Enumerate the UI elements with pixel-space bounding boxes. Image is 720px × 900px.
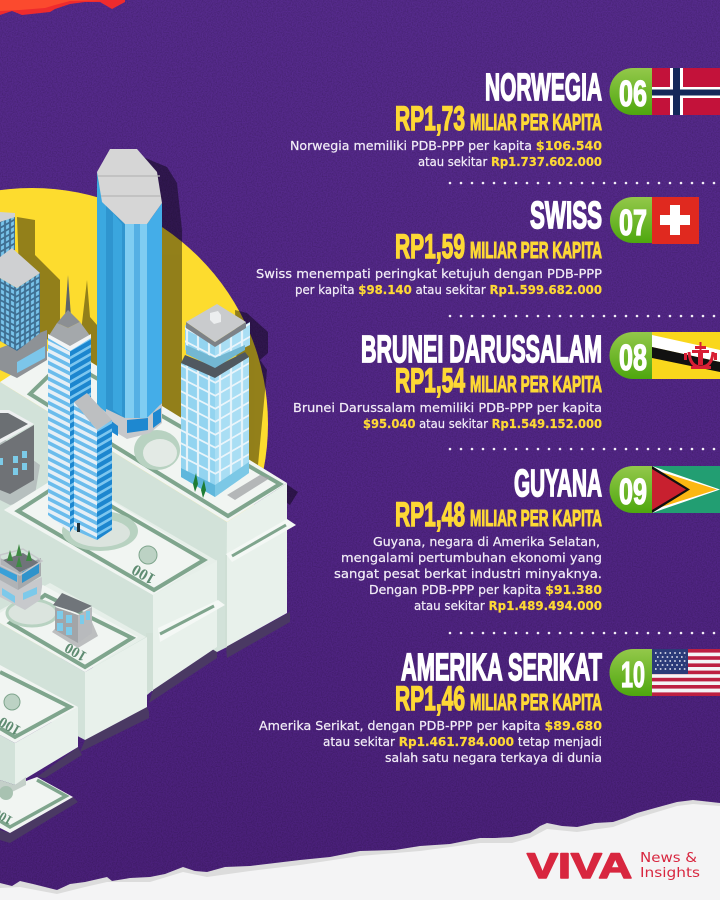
heading: Swiss: SWISS bbox=[530, 195, 602, 237]
description: $95.040 atau sekitar Rp1.549.152.000 bbox=[363, 416, 602, 431]
description: sangat pesat berkat industri minyaknya. bbox=[334, 566, 602, 581]
description: Guyana, negara di Amerika Selatan, bbox=[373, 534, 600, 549]
number pill 09 bbox=[609, 466, 652, 513]
striped twin blue tower bbox=[48, 275, 112, 540]
number pill 08: 08 bbox=[619, 337, 647, 378]
number pill 07: 07 bbox=[619, 202, 647, 243]
number pill 07 bbox=[610, 197, 652, 243]
number pill 06 bbox=[610, 68, 652, 115]
left towers bbox=[0, 212, 47, 378]
money stack B bbox=[0, 472, 225, 695]
number pill 10: 10 bbox=[621, 654, 645, 695]
number pill 09: 09 bbox=[619, 471, 647, 512]
description: atau sekitar Rp1.461.784.000 tetap menjadi bbox=[323, 734, 602, 749]
money stack D bbox=[0, 665, 78, 785]
section 07 Swiss bbox=[256, 195, 699, 297]
section 06 Norwegia bbox=[290, 67, 720, 169]
heading: Guyana: GUYANA bbox=[514, 463, 602, 505]
description: Dengan PDB-PPP per kapita $91.380 bbox=[369, 582, 602, 597]
logo: VIVA News & Insights: VIVA bbox=[527, 847, 632, 886]
description bbox=[290, 138, 602, 169]
money stack A bbox=[0, 343, 296, 652]
amount: Rp1,54: RP1,54 bbox=[395, 362, 465, 400]
bottom single bill bbox=[0, 777, 73, 833]
description bbox=[259, 718, 602, 765]
money stack C with small buildings: 100 bbox=[62, 639, 90, 664]
amount unit: MILIAR PER KAPITA bbox=[470, 689, 602, 715]
torn white paper footer bbox=[0, 800, 720, 900]
section 08 Brunei Darussalam bbox=[293, 329, 720, 431]
description: Norwegia memiliki PDB-PPP per kapita $106.540 bbox=[290, 138, 602, 153]
blue octagonal tower bbox=[97, 149, 162, 439]
flag: USA bbox=[652, 649, 720, 696]
bill value: 100 bbox=[129, 561, 158, 587]
description bbox=[256, 266, 602, 297]
flag: Switzerland bbox=[652, 197, 699, 244]
amount: Rp1,46: RP1,46 bbox=[395, 680, 465, 718]
flag: Guyana bbox=[652, 466, 720, 513]
amount unit: MILIAR PER KAPITA bbox=[470, 237, 602, 263]
torn red paper at top bbox=[0, 0, 125, 15]
bottom shadows of stacks bbox=[0, 612, 290, 843]
description bbox=[293, 400, 602, 431]
money stack C with small buildings bbox=[0, 544, 147, 740]
light-blue glass tower bbox=[181, 304, 270, 500]
logo: VIVA News & Insights bbox=[527, 847, 700, 886]
heading: Norwegia: NORWEGIA bbox=[485, 67, 602, 109]
description: per kapita $98.140 atau sekitar Rp1.599.682.000 bbox=[295, 282, 602, 297]
section 10 Amerika Serikat bbox=[259, 647, 720, 765]
building shadows bbox=[17, 157, 298, 505]
number pill 10 bbox=[609, 649, 652, 696]
logo: VIVA News & Insights: News & bbox=[640, 851, 697, 866]
coin under the blue tower bbox=[134, 430, 180, 470]
section 09 Guyana bbox=[334, 463, 720, 613]
description: salah satu negara terkaya di dunia bbox=[385, 750, 602, 765]
flag: Norway bbox=[652, 68, 720, 115]
description: Amerika Serikat, dengan PDB-PPP per kapita $89.680 bbox=[259, 718, 602, 733]
amount: Rp1,48: RP1,48 bbox=[395, 496, 465, 534]
description bbox=[334, 534, 602, 613]
number pill 08 bbox=[609, 332, 652, 379]
description: atau sekitar Rp1.737.602.000 bbox=[418, 154, 602, 169]
description: Swiss menempati peringkat ketujuh dengan PDB-PPP bbox=[256, 266, 602, 281]
description: atau sekitar Rp1.489.494.000 bbox=[414, 598, 602, 613]
description: mengalami pertumbuhan ekonomi yang bbox=[341, 550, 602, 565]
flag: Brunei bbox=[652, 332, 720, 379]
logo: VIVA News & Insights: Insights bbox=[640, 866, 700, 881]
amount unit: MILIAR PER KAPITA bbox=[470, 505, 602, 531]
number pill 06: 06 bbox=[619, 73, 647, 114]
description: Brunei Darussalam memiliki PDB-PPP per kapita bbox=[293, 400, 602, 415]
amount: Rp1,59: RP1,59 bbox=[395, 228, 465, 266]
yellow sun circle bbox=[0, 188, 268, 660]
amount unit: MILIAR PER KAPITA bbox=[470, 109, 602, 135]
isometric city on stacks of money bbox=[0, 149, 298, 843]
amount: Rp1,73: RP1,73 bbox=[395, 100, 465, 138]
amount unit: MILIAR PER KAPITA bbox=[470, 371, 602, 397]
grey building mid-left bbox=[0, 410, 40, 505]
